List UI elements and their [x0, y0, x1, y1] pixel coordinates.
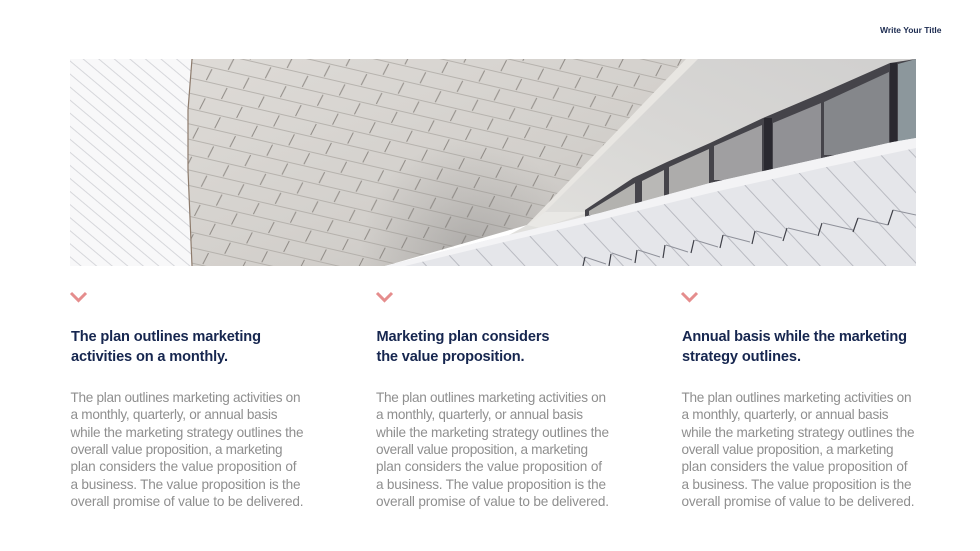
icon: chevron 1 — [71, 293, 86, 300]
column 2 — [375, 293, 609, 509]
body text 2: a monthly, quarterly, or annual basis — [376, 407, 583, 422]
body text 3: a monthly, quarterly, or annual basis — [682, 407, 889, 422]
body text 2: The plan outlines marketing activities on — [376, 390, 606, 405]
architectural photo — [70, 59, 916, 266]
heading 1: The plan outlines marketing — [71, 329, 261, 345]
photo: pale wall and ceiling band — [500, 59, 916, 240]
body text 2 — [375, 390, 609, 509]
photo: white tiled wall — [70, 59, 192, 266]
column 1 — [70, 293, 304, 509]
body text 1: while the marketing strategy outlines the — [70, 425, 304, 440]
body text 1: a monthly, quarterly, or annual basis — [70, 407, 278, 422]
heading 1: activities on a monthly. — [71, 349, 228, 365]
body text 2: plan considers the value proposition of — [376, 459, 602, 474]
photo: window band — [585, 59, 916, 220]
body text 3: The plan outlines marketing activities on — [682, 390, 912, 405]
body text 1: a business. The value proposition is the — [70, 477, 300, 492]
heading 3: Annual basis while the marketing — [682, 329, 907, 345]
body text 3: a business. The value proposition is the — [682, 477, 912, 492]
body text 2: a business. The value proposition is the — [376, 477, 606, 492]
body text 1 — [70, 390, 304, 509]
body text 3: while the marketing strategy outlines the — [680, 425, 914, 440]
heading 2 — [376, 329, 550, 365]
body text 1: overall promise of value to be delivered. — [70, 494, 304, 509]
photo: brick vault ceiling — [188, 59, 697, 266]
photo: white roof with diagonal tiles — [385, 138, 916, 266]
body text 3 — [680, 390, 914, 509]
body text 1: overall value proposition, a marketing — [70, 442, 282, 457]
icon: chevron 3 — [682, 293, 697, 300]
body text 3: overall value proposition, a marketing — [682, 442, 894, 457]
column 3 — [680, 293, 914, 509]
body text 2: overall promise of value to be delivered. — [376, 494, 609, 509]
body text 1: plan considers the value proposition of — [70, 459, 297, 474]
heading 2: the value proposition. — [376, 349, 524, 365]
heading 3 — [682, 329, 907, 365]
heading 3: strategy outlines. — [682, 349, 801, 365]
body text 2: while the marketing strategy outlines the — [375, 425, 609, 440]
heading 2: Marketing plan considers — [376, 329, 550, 345]
icon: chevron 2 — [377, 293, 392, 300]
body text 1: The plan outlines marketing activities on — [70, 390, 300, 405]
page title: Write Your Title — [880, 25, 942, 35]
body text 2: overall value proposition, a marketing — [376, 442, 588, 457]
body text 3: plan considers the value proposition of — [682, 459, 908, 474]
heading 1 — [71, 329, 261, 365]
body text 3: overall promise of value to be delivered. — [682, 494, 914, 509]
